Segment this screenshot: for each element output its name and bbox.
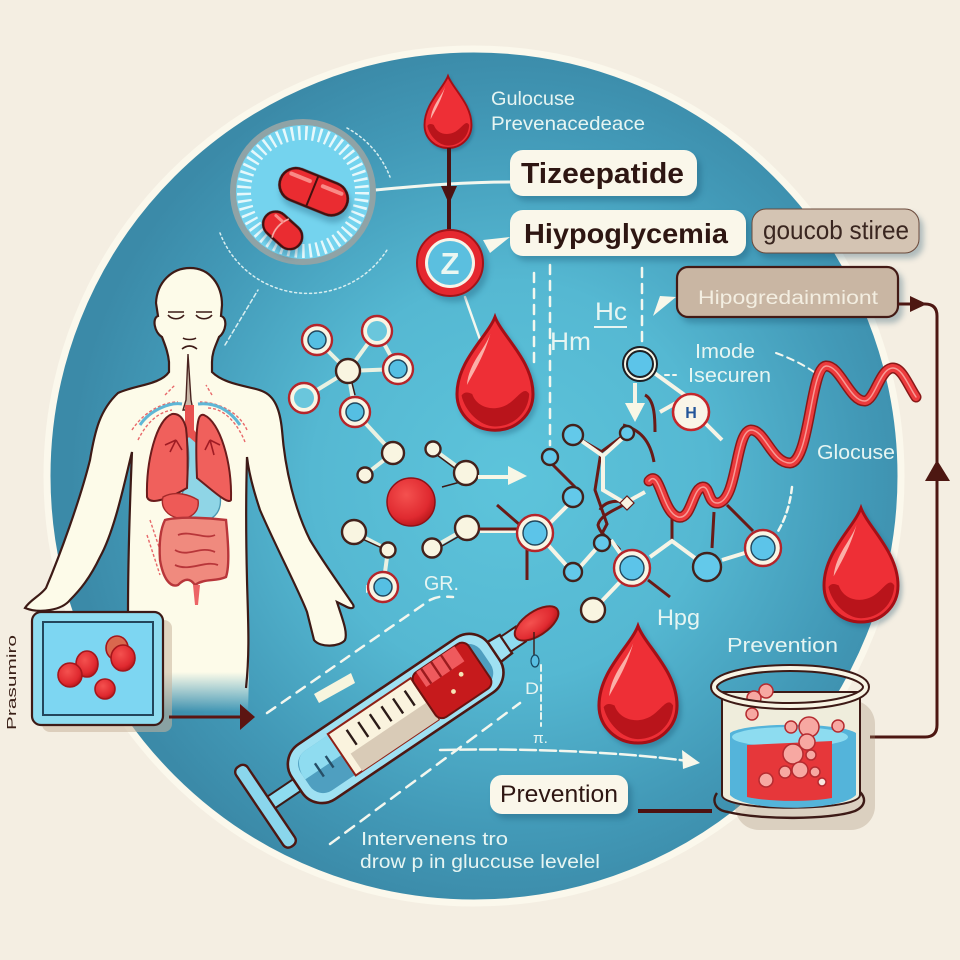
label: Prevention: Prevention <box>500 781 618 808</box>
ring nodes <box>517 515 781 586</box>
connector: prevention to beaker <box>638 809 712 813</box>
top blue node <box>623 347 657 381</box>
molecule chain: centre <box>478 347 781 622</box>
small labels in circle: π. <box>533 730 548 747</box>
red sphere <box>387 478 435 526</box>
feedback arrow line <box>870 296 950 737</box>
small labels in circle: Hpg <box>657 605 700 630</box>
small labels in circle: Intervenens tro <box>361 829 508 849</box>
small labels in circle: D <box>525 679 539 698</box>
small labels in circle: Glocuse <box>817 442 895 464</box>
arrow: box to syringe <box>169 704 255 730</box>
small labels in circle: Imode <box>695 341 755 363</box>
right lung <box>196 415 231 501</box>
large capsule <box>275 163 353 220</box>
panel: pills box <box>32 612 172 732</box>
icon: Z ring <box>417 230 483 296</box>
heading text: glucose prevalence: Prevenacedeace <box>491 114 645 135</box>
person figure <box>25 268 354 712</box>
label: Tizeepatide: Tizeepatide <box>521 158 684 190</box>
H node <box>673 394 709 430</box>
ring nodes <box>289 316 413 602</box>
bubbles <box>746 684 844 787</box>
small labels in circle: drow p in gluccuse levelel <box>360 852 600 873</box>
trachea <box>183 354 193 410</box>
label: Hipogredainmiont: Hipogredainmiont <box>698 288 879 309</box>
intestines <box>160 518 228 586</box>
small capsule <box>258 206 307 254</box>
icon: small blood drop <box>424 76 472 148</box>
windpipe <box>175 405 202 446</box>
stomach <box>175 435 220 521</box>
blue nodes <box>542 425 721 581</box>
node cream <box>581 598 605 622</box>
icon: large blood drop <box>457 317 533 430</box>
label: goucob stiree: goucob stiree <box>763 215 909 245</box>
molecule cluster: left <box>289 316 527 602</box>
label: goucob stiree <box>752 209 919 253</box>
icon: beaker <box>714 668 875 830</box>
main circle panel <box>47 49 901 903</box>
label: Hiypoglycemia <box>510 210 746 256</box>
tilted label bar <box>314 673 355 703</box>
heading text: glucose prevalence: Gulocuse <box>491 89 575 110</box>
cream nodes <box>336 359 479 558</box>
small labels in circle <box>360 298 895 873</box>
bond dark strip <box>478 528 520 530</box>
liver <box>162 494 198 518</box>
small labels in circle: Prevention <box>727 635 838 657</box>
heading text: glucose prevalence <box>491 89 645 135</box>
syringe <box>233 570 584 850</box>
down arrow <box>625 403 645 422</box>
small labels in circle: Isecuren <box>688 365 771 387</box>
label: Tizeepatide <box>510 150 697 196</box>
arrow <box>478 466 527 485</box>
icon: pill magnifier <box>233 122 373 262</box>
rotated label: Prasumiro <box>4 635 19 730</box>
glucose curve <box>649 366 916 517</box>
icon: Z ring: Z <box>441 246 460 281</box>
red block <box>747 741 832 801</box>
small labels in circle: Hm <box>550 328 591 356</box>
label: Prevention <box>490 775 628 814</box>
small labels in circle: Hc <box>595 298 627 326</box>
face <box>168 312 212 349</box>
needle drip <box>531 632 539 667</box>
label: Hiypoglycemia: Hiypoglycemia <box>524 218 728 249</box>
white arrowheads <box>366 237 700 769</box>
connector lines and arrows <box>220 128 814 844</box>
icon: right blood drop <box>824 508 898 622</box>
icon: lower blood drop <box>599 626 677 743</box>
small labels in circle: GR. <box>424 573 459 595</box>
H node: H <box>685 405 697 422</box>
pills <box>58 636 135 699</box>
arrow: drop to ring <box>441 148 457 230</box>
blood vessels <box>132 385 247 575</box>
label: Hipogredainmiont <box>677 267 898 317</box>
left lung <box>147 414 188 501</box>
